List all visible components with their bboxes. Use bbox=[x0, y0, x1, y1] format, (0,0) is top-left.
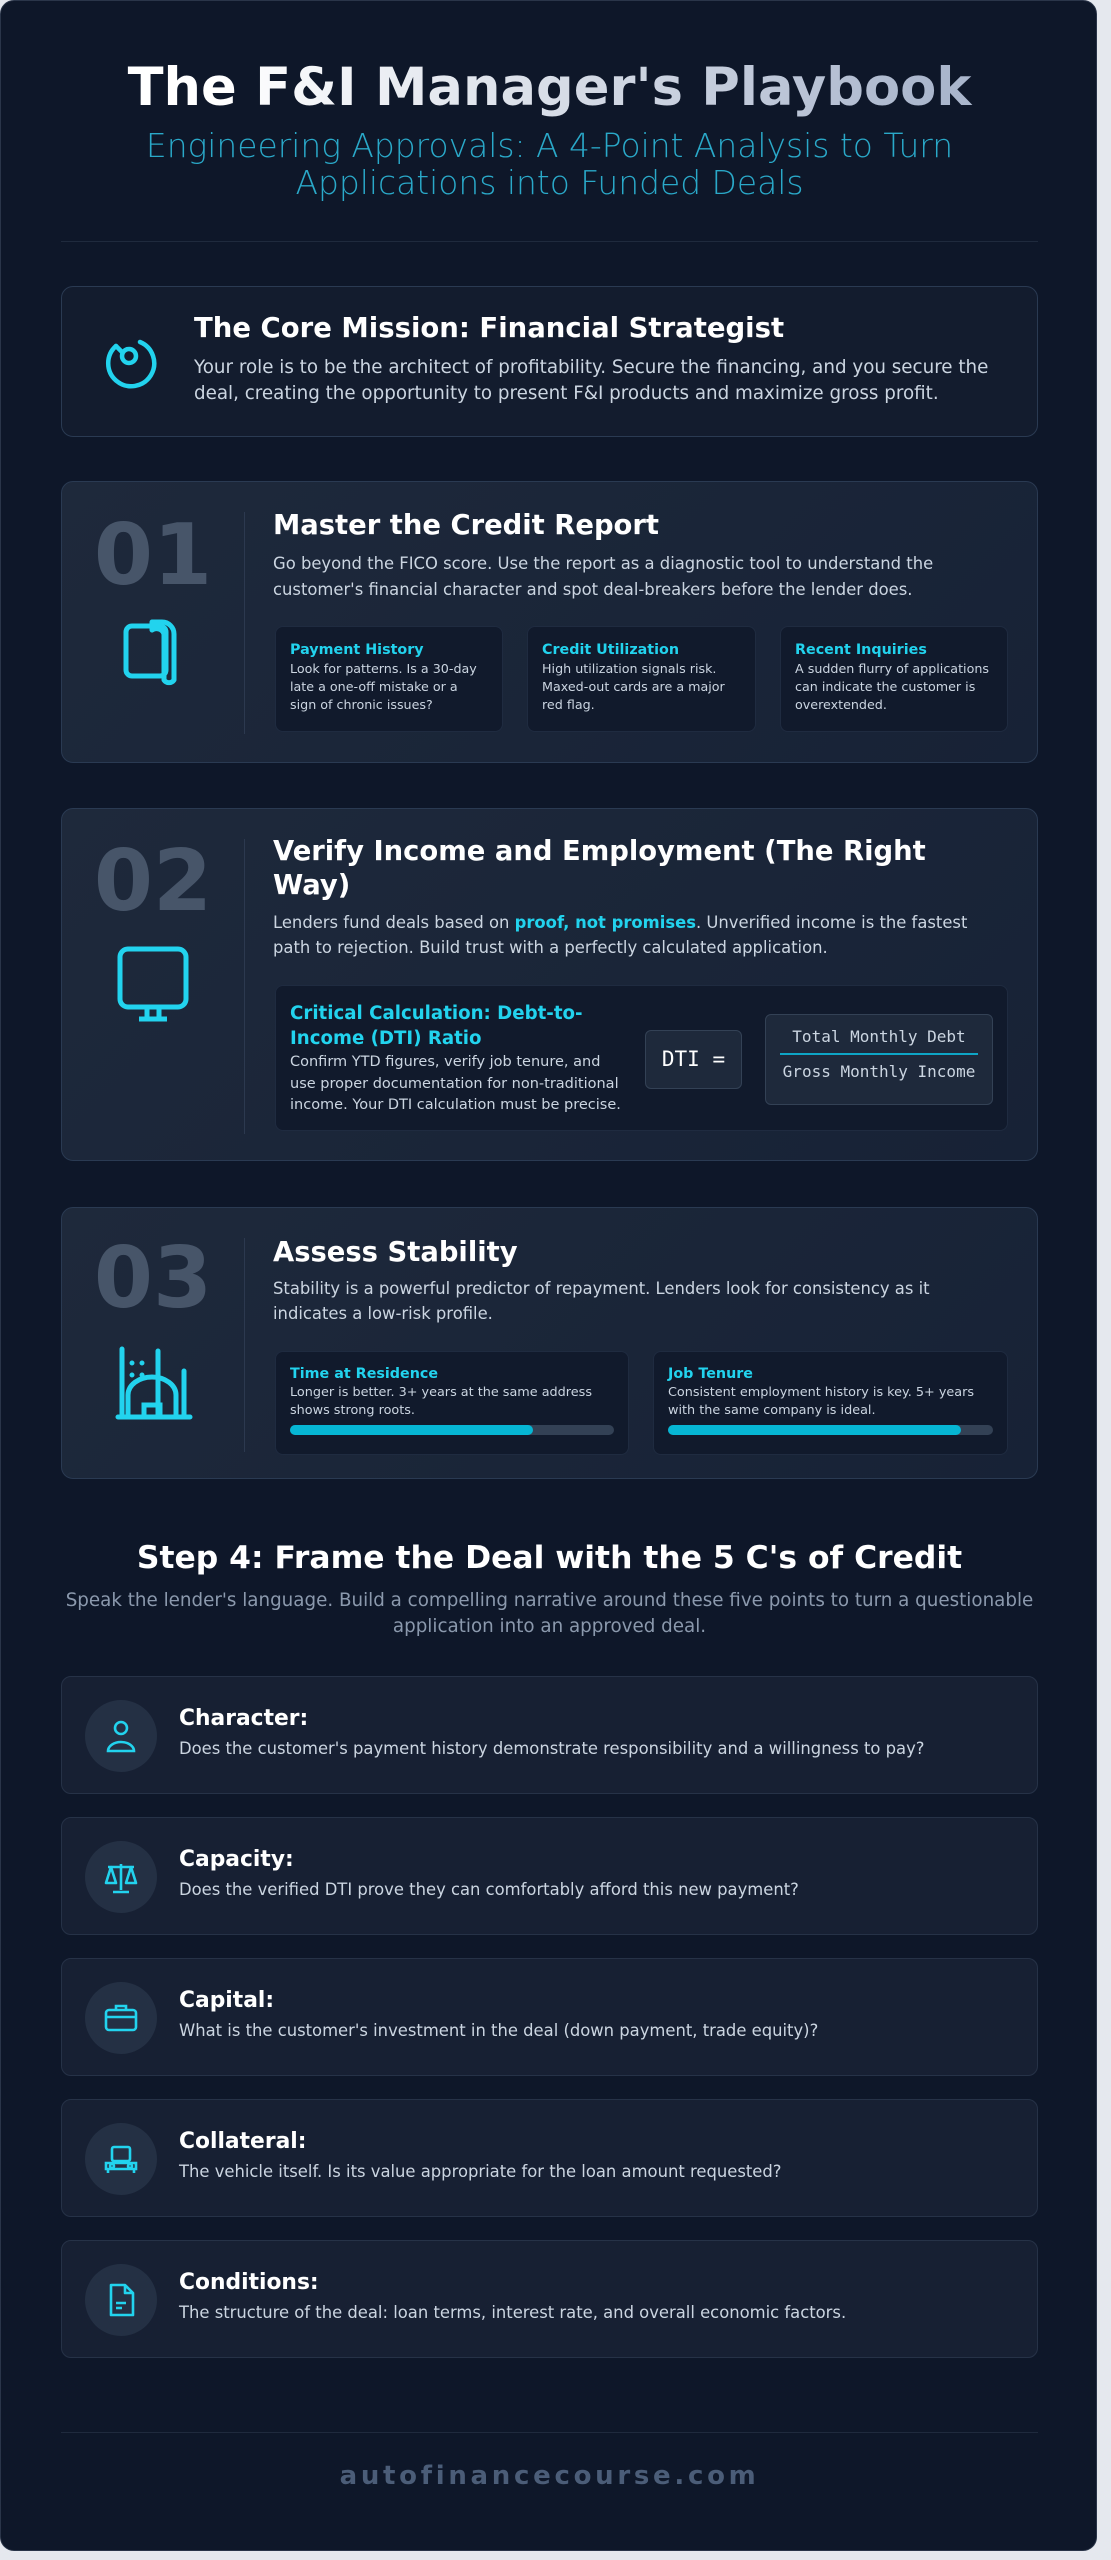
card: collateral: The vehicle itself. Is its value appropriate for the loan amount requested? bbox=[179, 2162, 781, 2181]
number 01: 01 bbox=[94, 506, 212, 605]
sub: credit utilization: Maxed-out cards are a major bbox=[542, 679, 725, 694]
card: capital bbox=[61, 1958, 1038, 2076]
icon: scales bbox=[85, 1841, 157, 1913]
panel: 03 stability bbox=[61, 1207, 1038, 1479]
sub: payment history: late a one-off mistake or a bbox=[290, 679, 458, 694]
heading: Master the Credit Report bbox=[273, 510, 659, 541]
sub: recent inquiries: can indicate the customer is bbox=[795, 679, 975, 694]
sub: payment history bbox=[275, 626, 503, 732]
sub: time at residence bbox=[275, 1351, 629, 1455]
sub: time at residence: Longer is better. 3+ years at the same address bbox=[290, 1385, 592, 1400]
icon: file bbox=[85, 2264, 157, 2336]
sub: credit utilization: High utilization signals risk. bbox=[542, 661, 716, 676]
step 4 subtitle: application into an approved deal. bbox=[393, 1616, 706, 1637]
heading bbox=[273, 836, 926, 901]
subtitle: Engineering Approvals: A 4-Point Analysis to Turn bbox=[146, 126, 953, 165]
sub: job tenure: Job Tenure bbox=[668, 1366, 753, 1382]
dti text: use proper documentation for non-traditional bbox=[290, 1076, 619, 1092]
text: Go beyond the FICO score. Use the report as a diagnostic tool to understand the bbox=[273, 554, 933, 573]
step 4 subtitle bbox=[66, 1590, 1033, 1637]
dti text: income. Your DTI calculation must be precise. bbox=[290, 1097, 621, 1113]
card: conditions bbox=[61, 2240, 1038, 2358]
footer: autofinancecourse.com bbox=[340, 2461, 759, 2491]
sub: recent inquiries: Recent Inquiries bbox=[795, 642, 927, 658]
dti heading: Income (DTI) Ratio bbox=[290, 1028, 482, 1049]
text: Your role is to be the architect of profitability. Secure the financing, and you secure the bbox=[194, 357, 988, 378]
dti heading bbox=[290, 1003, 583, 1049]
number 02: 02 bbox=[94, 832, 212, 931]
heading: Verify Income and Employment (The Right bbox=[273, 836, 926, 867]
card: capital: What is the customer's investment in the deal (down payment, trade equity)? bbox=[179, 2021, 818, 2040]
sub: payment history: Look for patterns. Is a 30-day bbox=[290, 661, 477, 676]
text: customer's financial character and spot deal-breakers before the lender does. bbox=[273, 580, 912, 599]
heading: The Core Mission: Financial Strategist bbox=[194, 312, 784, 344]
card: conditions: The structure of the deal: loan terms, interest rate, and overall economic factors. bbox=[179, 2303, 846, 2322]
sub: job tenure: with the same company is ideal. bbox=[668, 1403, 876, 1418]
text: path to rejection. Build trust with a perfectly calculated application. bbox=[273, 938, 828, 957]
card: capacity: Does the verified DTI prove they can comfortably afford this new payment? bbox=[179, 1880, 799, 1899]
icon: monitor bbox=[118, 946, 188, 1022]
subtitle bbox=[146, 126, 953, 202]
icon: building bbox=[116, 1346, 192, 1420]
fraction: Total Monthly Debt bbox=[792, 1027, 966, 1046]
heading: Way) bbox=[273, 870, 350, 901]
step 4 subtitle: Speak the lender's language. Build a compelling narrative around these five points to turn a questionable bbox=[66, 1590, 1033, 1611]
sub: payment history: Payment History bbox=[290, 642, 424, 658]
panel: core mission bbox=[61, 286, 1038, 437]
text bbox=[273, 554, 933, 599]
card: character: Does the customer's payment history demonstrate responsibility and a willingness to pay? bbox=[179, 1739, 924, 1758]
dti text: Confirm YTD figures, verify job tenure, and bbox=[290, 1054, 600, 1070]
sub: recent inquiries bbox=[780, 626, 1008, 732]
sub: credit utilization: red flag. bbox=[542, 697, 595, 712]
title bbox=[1, 53, 1098, 123]
dti heading: Critical Calculation: Debt-to- bbox=[290, 1003, 583, 1024]
icon: target bbox=[106, 340, 157, 388]
bar 90% bbox=[668, 1425, 993, 1435]
sub: job tenure bbox=[653, 1351, 1008, 1455]
sub: recent inquiries: overextended. bbox=[795, 697, 887, 712]
dti box bbox=[275, 985, 1008, 1131]
card: capacity bbox=[61, 1817, 1038, 1935]
number 03: 03 bbox=[94, 1229, 212, 1328]
panel: 02 income bbox=[61, 808, 1038, 1161]
text: indicates a low-risk profile. bbox=[273, 1304, 493, 1323]
subtitle: Applications into Funded Deals bbox=[295, 163, 804, 202]
icon: document bbox=[124, 620, 176, 686]
heading: Assess Stability bbox=[273, 1237, 518, 1268]
card: collateral bbox=[61, 2099, 1038, 2217]
text: Stability is a powerful predictor of repayment. Lenders look for consistency as it bbox=[273, 1279, 930, 1298]
card: capital: Capital: bbox=[179, 1988, 274, 2013]
title: The F&I Manager's Playbook bbox=[128, 57, 971, 118]
sub: job tenure: Consistent employment history is key. 5+ years bbox=[668, 1385, 974, 1400]
dti label bbox=[645, 1030, 742, 1089]
icon: person bbox=[85, 1700, 157, 1772]
sub: time at residence: shows strong roots. bbox=[290, 1403, 415, 1418]
bar 75% bbox=[290, 1425, 614, 1435]
dti text bbox=[290, 1054, 621, 1113]
card: collateral: Collateral: bbox=[179, 2129, 306, 2154]
step 4 heading: Step 4: Frame the Deal with the 5 C's of Credit bbox=[137, 1540, 962, 1576]
dti label: DTI = bbox=[662, 1047, 725, 1071]
card: character bbox=[61, 1676, 1038, 1794]
sub: credit utilization bbox=[527, 626, 756, 732]
text bbox=[194, 357, 988, 404]
text bbox=[273, 913, 968, 957]
icon: briefcase bbox=[85, 1982, 157, 2054]
text bbox=[273, 1279, 930, 1323]
card: character: Character: bbox=[179, 1706, 308, 1731]
icon: car bbox=[85, 2123, 157, 2195]
text: Lenders fund deals based on proof, not promises. Unverified income is the fastest bbox=[273, 913, 967, 932]
sub: credit utilization: Credit Utilization bbox=[542, 642, 679, 658]
fraction: Gross Monthly Income bbox=[783, 1062, 975, 1081]
sub: recent inquiries: A sudden flurry of applications bbox=[795, 661, 989, 676]
card: conditions: Conditions: bbox=[179, 2270, 319, 2295]
sub: time at residence: Time at Residence bbox=[290, 1366, 438, 1382]
panel: 01 credit report bbox=[61, 481, 1038, 763]
card: capacity: Capacity: bbox=[179, 1847, 294, 1872]
sub: payment history: sign of chronic issues? bbox=[290, 697, 433, 712]
fraction bbox=[765, 1014, 993, 1105]
text: deal, creating the opportunity to present F&I products and maximize gross profit. bbox=[194, 383, 939, 404]
